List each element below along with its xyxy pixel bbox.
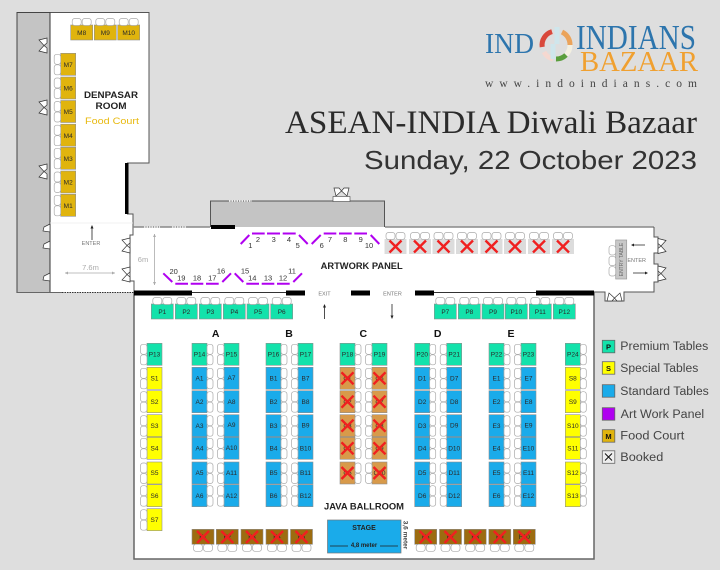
entry table [609,240,648,279]
food court tables column: M2 [64,180,73,186]
right special column [565,343,586,507]
column E1-E6: E2 [493,399,501,406]
legend: special tables: Special Tables [620,363,699,375]
exit and enter markers [318,292,402,319]
column B7-B12 [292,343,313,507]
stage: 3,6 meter [402,521,408,550]
column C1-C5 booked: C4 [343,446,352,452]
column D1-D6: D5 [418,470,427,477]
column D7-D12: D11 [448,470,460,477]
column D1-D6: D1 [418,376,427,382]
column C1-C5 booked [340,343,361,484]
column E7-E12: E12 [523,493,535,500]
food court tables column: M7 [64,62,73,69]
column E1-E6: E5 [493,470,501,477]
column A1-A6: A5 [196,470,204,477]
food court tables column: M5 [64,109,73,116]
column B1-B6: P16 [268,352,280,358]
legend: standard tables: Standard Tables [620,386,709,398]
column B7-B12: B10 [300,446,312,452]
column B7-B12: P17 [300,352,312,358]
art work panel numbers: 8 [343,235,347,244]
column D7-D12: D10 [448,446,461,452]
booked front tables right: F9 [496,534,504,541]
column C6-C10 booked [366,343,387,484]
column C6-C10 booked: P19 [374,352,386,358]
food court tables column: M1 [64,203,73,210]
column A7-A12: A7 [228,375,236,382]
column E1-E6: E1 [493,376,501,382]
section letters [212,328,515,340]
denpasar room label: DENPASAR [84,90,139,100]
legend: food court [602,430,685,442]
legend: special tables [602,362,699,375]
column E7-E12: E8 [525,399,533,406]
art work panel numbers: 20 [170,267,178,276]
food court tables top row: M9 [101,30,110,37]
legend: booked: Booked [620,452,663,464]
foyer enter arrow and dimensions [65,225,156,285]
column C1-C5 booked: P18 [342,352,354,358]
upper roof block [210,188,384,229]
column E7-E12: E9 [525,422,533,430]
booked front tables right: F6 [422,534,430,541]
art work panel numbers: 5 [296,241,300,250]
logo: Indo Indians Bazaar: BAZAAR [580,47,698,78]
booked front tables left: F2 [224,534,231,541]
column C6-C10 booked: C6 [375,376,384,382]
art work panel numbers: 2 [256,235,260,244]
column E7-E12: P23 [523,352,535,358]
right special column: S10 [567,423,579,430]
column C1-C5 booked: C3 [343,423,352,430]
food court tables column: M6 [64,86,73,92]
column C1-C5 booked: C1 [343,376,352,382]
booked front tables left: F3 [248,534,256,541]
left special column: S1 [151,376,159,382]
art work panel numbers: 7 [328,235,332,244]
art work panel numbers: 10 [365,241,373,250]
foyer enter arrow and dimensions: ENTER [82,241,100,247]
logo: Indo Indians Bazaar: IND [485,28,534,60]
premium tables right row: P8 [465,309,474,316]
food court tables column: M4 [64,133,73,140]
column A7-A12: A12 [226,493,238,500]
right special column: P24 [567,352,579,358]
column B1-B6: B5 [270,470,278,477]
column A1-A6: A3 [196,423,204,430]
premium tables right row: P9 [489,309,497,316]
food court tables top row: M10 [122,30,135,37]
art work panel numbers: 4 [287,235,291,244]
food court tables column: M3 [64,156,73,163]
exit and enter markers: EXIT [318,292,331,298]
entry table: ENTRY TABLE [619,242,625,276]
column B1-B6 [266,343,287,507]
art work panel numbers: 16 [217,266,225,276]
art work panel numbers: 18 [193,274,201,282]
left special column [140,343,162,531]
exit and enter markers: ENTER [383,292,402,298]
art work panel numbers: 17 [208,274,216,282]
booked front tables right: F10 [519,534,530,541]
column A7-A12: A9 [228,422,236,429]
legend: food court: M [605,432,612,441]
denpasar room label: Food Court [85,116,140,126]
date subtitle: Sunday, 22 October 2023 [364,145,697,175]
art work panel numbers: 13 [264,274,272,282]
column C6-C10 booked: C7 [375,399,384,406]
premium tables left row: P5 [254,309,262,316]
denpasar room label [84,90,140,126]
premium tables left row [151,298,293,319]
column C6-C10 booked: C10 [374,470,386,477]
art work panel numbers: 6 [320,241,324,250]
left special column: S3 [151,423,159,430]
section letters: D [434,328,442,340]
left special column: S6 [151,493,159,500]
art work panel numbers: 1 [248,241,252,250]
art work panel numbers: 15 [241,266,249,276]
stage: STAGE [352,525,376,532]
doors [39,38,666,301]
column C1-C5 booked: C5 [343,470,352,477]
column A1-A6: A2 [196,399,204,406]
title: ASEAN-INDIA Diwali Bazaar [285,105,697,141]
column E1-E6: P22 [491,352,503,358]
column E1-E6: E6 [493,493,501,500]
column B7-B12: B12 [300,493,312,500]
column E1-E6: E4 [493,446,501,452]
legend: premium tables: Premium Tables [620,341,709,353]
column B7-B12: B8 [302,399,310,406]
art work panel numbers [170,235,373,282]
column A7-A12: A10 [226,445,238,452]
food court tables top row [71,18,140,40]
column E7-E12: E7 [525,376,533,382]
column A7-A12: A11 [226,470,237,477]
booked front tables left: F1 [199,534,207,541]
column B7-B12: B9 [302,422,310,430]
legend: food court: Food Court [620,430,685,442]
food court tables column [54,53,76,216]
column B1-B6: B1 [270,376,278,382]
section letters: C [360,328,368,340]
column B1-B6: B4 [270,446,278,452]
column E7-E12 [514,343,536,507]
column D1-D6: D2 [418,399,427,406]
column D1-D6: D6 [418,493,427,500]
booked front tables left: F4 [273,534,281,541]
premium tables right row: P12 [559,309,570,316]
legend [602,340,709,464]
entry table: ENTER [627,258,646,264]
right special column: S12 [567,470,579,477]
column E1-E6: E3 [493,423,501,430]
left special column: S2 [151,399,159,406]
denpasar wall [125,163,128,214]
section letters: B [285,328,293,340]
booked front tables left [192,529,312,551]
column D7-D12: D9 [450,422,459,430]
column D1-D6: D4 [418,446,427,452]
column B7-B12: B11 [300,470,311,477]
booked tables hall row [384,232,574,254]
column D7-D12: D7 [450,376,459,382]
hall bottom walls [134,290,594,296]
column D7-D12 [440,343,462,507]
art work panel numbers: 14 [248,274,256,282]
column C6-C10 booked: C8 [375,423,384,430]
art work panel numbers: 19 [177,274,185,282]
column E7-E12: E10 [523,446,535,452]
art work panel numbers: 12 [279,274,287,282]
premium tables left row: P3 [206,309,215,316]
column A7-A12 [218,343,239,507]
art work panels lower [163,273,302,284]
logo: Indo Indians Bazaar: INDIANS [576,18,696,57]
premium tables left row: P4 [230,309,239,316]
column D1-D6: P20 [416,352,428,358]
left special column: S5 [151,470,159,477]
foyer enter arrow and dimensions: 6m [138,255,148,264]
column A1-A6: P14 [194,352,206,358]
column A1-A6 [192,343,213,507]
column B1-B6: B3 [270,423,278,430]
artwork panel label: ARTWORK PANEL [321,261,403,271]
food court tables top row: M8 [77,30,87,37]
column A7-A12: A8 [228,399,236,406]
legend: art work panel: Art Work Panel [621,409,704,421]
booked front tables right [415,529,535,551]
premium tables right row [434,298,575,319]
column A1-A6: A1 [196,376,204,382]
legend: special tables: S [606,364,611,373]
section letters: A [212,328,220,340]
premium tables left row: P1 [158,309,167,316]
denpasar room label: ROOM [96,101,126,111]
stage [328,520,408,553]
premium tables right row: P11 [535,309,546,316]
java ballroom label: JAVA BALLROOM [324,502,404,512]
legend: premium tables: P [606,342,611,352]
column D1-D6: D3 [418,423,427,430]
left special column: S4 [151,446,159,452]
logo: Indo Indians Bazaar [485,18,698,90]
foyer enter arrow and dimensions: 7.6m [82,263,99,272]
column B1-B6: B6 [270,493,278,500]
column A7-A12: P15 [226,352,238,358]
column C6-C10 booked: C9 [375,446,384,452]
column B7-B12: B7 [302,376,310,382]
left special column: P13 [149,352,161,358]
premium tables left row: P2 [182,309,191,316]
left special column: S7 [151,517,159,524]
right special column: S11 [567,446,579,452]
booked front tables right: F7 [447,534,455,541]
stage: 4,8 meter [351,543,378,549]
art work panel numbers: 11 [288,266,296,276]
art work panel numbers: 9 [359,235,363,244]
premium tables right row: P10 [511,309,522,316]
right special column: S13 [567,493,579,500]
column A1-A6: A6 [196,493,204,500]
art work panels upper [241,234,379,244]
booked front tables left: F5 [298,534,306,541]
premium tables right row: P7 [441,309,450,316]
column E7-E12: E11 [523,470,534,477]
column D7-D12: D8 [450,399,459,406]
column A1-A6: A4 [196,446,204,452]
column D1-D6 [415,343,436,507]
logo: Indo Indians Bazaar: www.indoindians.com [485,78,697,90]
column C1-C5 booked: C2 [343,399,352,406]
column D7-D12: D12 [448,493,461,500]
column E1-E6 [489,343,510,507]
right special column: S8 [569,376,577,382]
right special column: S9 [569,399,577,406]
premium tables left row: P6 [278,309,286,316]
column D7-D12: P21 [448,352,460,358]
art work panel numbers: 3 [272,235,276,244]
booked front tables right: F8 [471,534,479,541]
column B1-B6: B2 [270,399,278,406]
section letters: E [507,328,515,340]
